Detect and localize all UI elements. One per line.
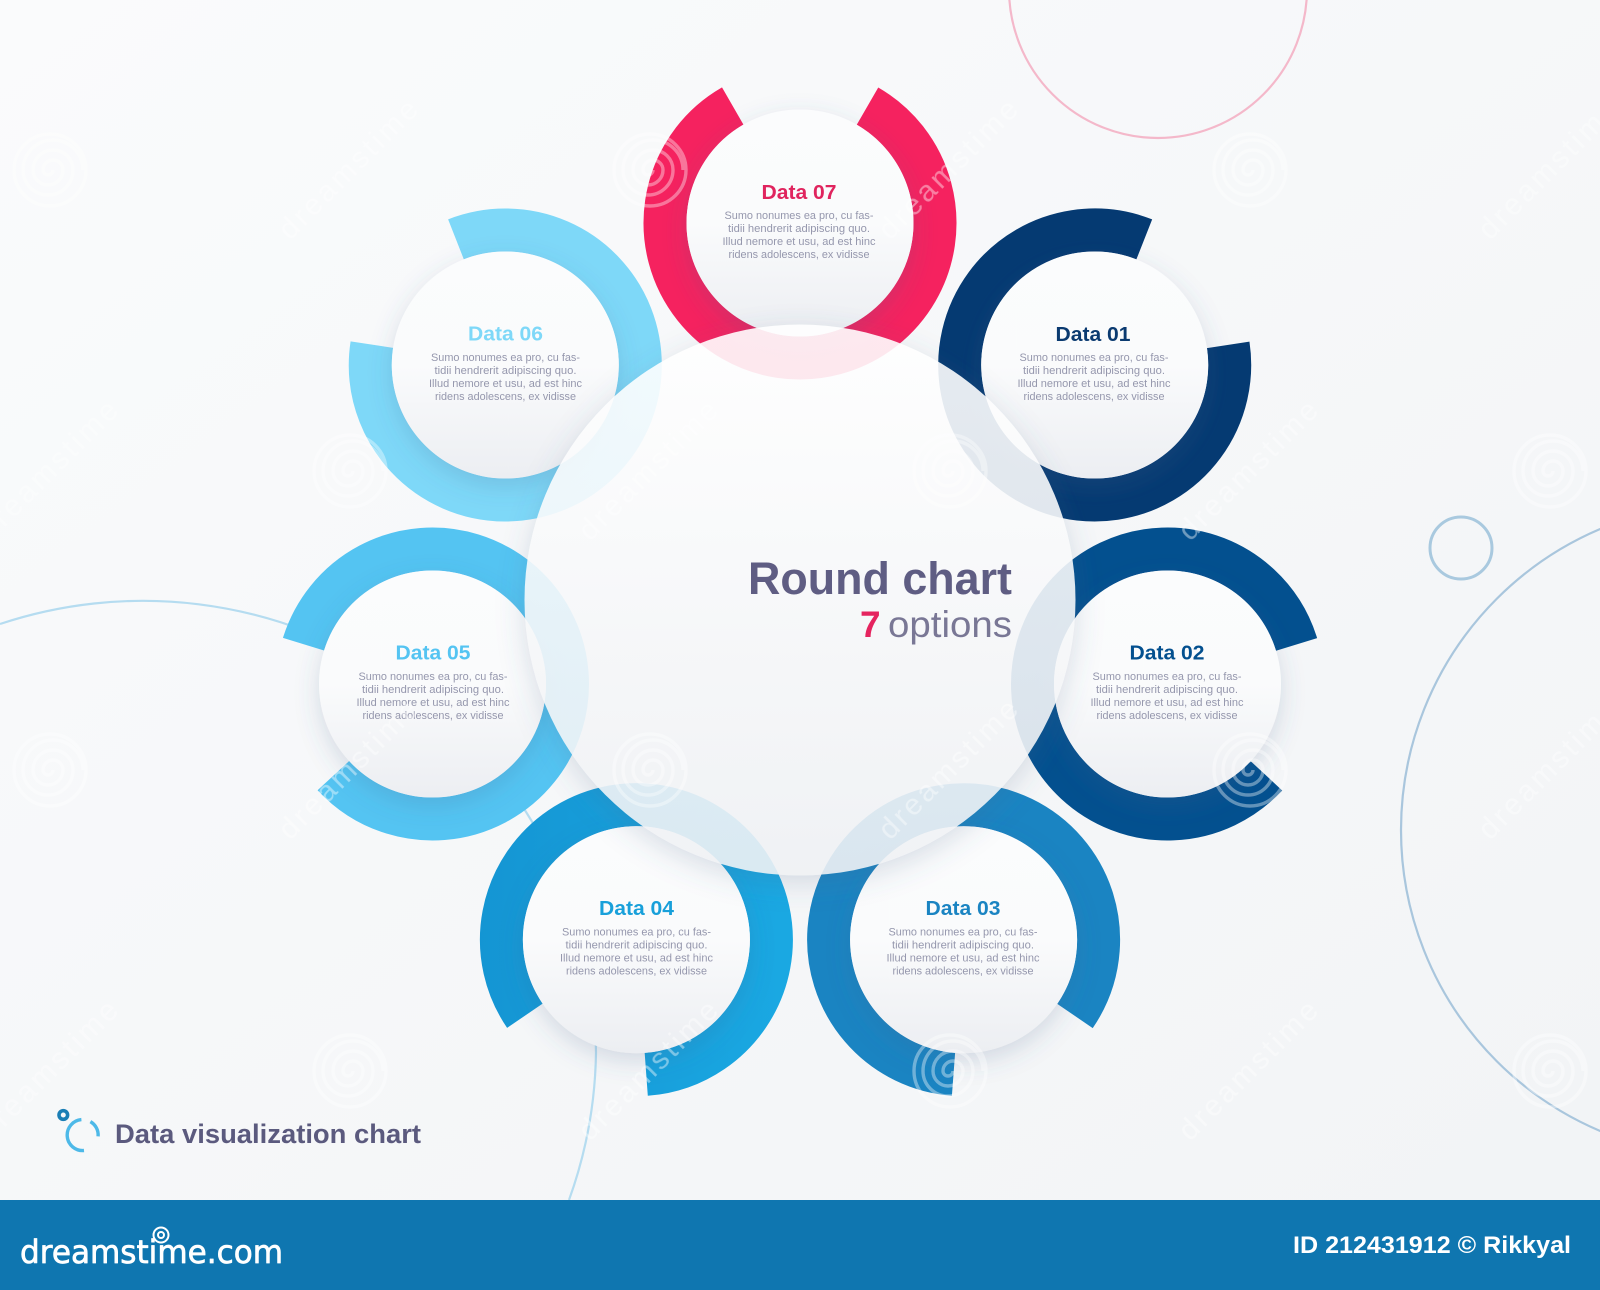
bottom bar	[0, 1200, 1600, 1290]
segment: Data 06: Sumo nonumes ea pro, cu fas-	[431, 352, 580, 364]
image id and credit: ID 212431912 © Rikkyal	[1293, 1232, 1571, 1259]
brand logo text: dreamstime.com	[20, 1233, 283, 1271]
segment: Data 06: tidii hendrerit adipiscing quo.	[434, 365, 576, 377]
decorative circle: large left	[0, 601, 596, 1200]
segment: Data 05: ridens adolescens, ex vidisse	[362, 710, 504, 722]
segment: Data 05: Illud nemore et usu, ad est hinc	[356, 697, 510, 709]
segment: Data 05	[264, 515, 601, 853]
center heading: Round chart	[748, 553, 1012, 604]
segment: Data 01: ridens adolescens, ex vidisse	[1024, 391, 1164, 403]
watermark text: dreamstime	[272, 691, 427, 846]
segment: Data 05: Data 05	[396, 642, 470, 664]
segment: Data 04: Sumo nonumes ea pro, cu fas-	[562, 926, 711, 938]
segment: Data 01: Sumo nonumes ea pro, cu fas-	[1020, 352, 1169, 364]
segment: Data 07	[616, 39, 984, 407]
decorative circle: small right	[1430, 517, 1492, 579]
segment: Data 07: Sumo nonumes ea pro, cu fas-	[724, 210, 874, 222]
watermark text: dreamstime	[1172, 392, 1327, 547]
segment: Data 06: ridens adolescens, ex vidisse	[435, 391, 576, 403]
segment: Data 04: ridens adolescens, ex vidisse	[566, 966, 707, 978]
segment: Data 03: Sumo nonumes ea pro, cu fas-	[888, 926, 1038, 938]
watermark spirals	[14, 134, 1586, 1107]
decorative circle: pink top	[1009, 0, 1307, 138]
segment: Data 03: ridens adolescens, ex vidisse	[892, 966, 1034, 978]
segment: Data 07: Illud nemore et usu, ad est hinc	[722, 236, 876, 248]
segment: Data 03: Illud nemore et usu, ad est hinc	[886, 952, 1040, 964]
segment: Data 02: ridens adolescens, ex vidisse	[1096, 710, 1238, 722]
segment: Data 02: Sumo nonumes ea pro, cu fas-	[1092, 671, 1242, 683]
icon: brand spiral	[154, 1228, 168, 1242]
segment: Data 06: Data 06	[468, 322, 543, 346]
segment: Data 04	[449, 752, 824, 1127]
segment: Data 05: Sumo nonumes ea pro, cu fas-	[358, 671, 508, 683]
segment: Data 02: tidii hendrerit adipiscing quo.	[1096, 684, 1238, 696]
segment: Data 05: tidii hendrerit adipiscing quo.	[362, 684, 504, 696]
watermark text: dreamstime	[872, 91, 1027, 246]
segment: Data 07: tidii hendrerit adipiscing quo.	[728, 223, 870, 235]
center heading: options	[888, 604, 1012, 645]
icon: data ring	[59, 1111, 98, 1151]
segment: Data 07: Data 07	[762, 181, 836, 204]
footer label with icon: Data visualization chart	[115, 1119, 421, 1149]
watermark text: dreamstime	[572, 992, 727, 1147]
segment: Data 03: tidii hendrerit adipiscing quo.	[892, 940, 1034, 952]
segment: Data 02: Data 02	[1130, 642, 1204, 664]
segment: Data 03: Data 03	[926, 897, 1000, 920]
center heading	[748, 553, 1012, 645]
segment: Data 01: Illud nemore et usu, ad est hinc	[1018, 378, 1171, 390]
segment: Data 06: Illud nemore et usu, ad est hinc	[429, 378, 582, 390]
segment: Data 01: Data 01	[1056, 323, 1130, 346]
footer label with icon	[59, 1111, 421, 1151]
segment: Data 04: Illud nemore et usu, ad est hinc	[560, 952, 713, 964]
watermark text: dreamstime	[1172, 992, 1327, 1147]
decorative circle: large right	[1401, 503, 1600, 1157]
segment: Data 02	[977, 493, 1358, 875]
watermark text: dreamstime	[572, 392, 727, 547]
segment: Data 01: tidii hendrerit adipiscing quo.	[1023, 365, 1165, 377]
center heading: 7	[860, 604, 881, 645]
segment: Data 03	[819, 795, 1108, 1084]
central glass circle	[524, 324, 1076, 876]
segment: Data 01	[941, 211, 1248, 519]
segment: Data 07: ridens adolescens, ex vidisse	[728, 249, 870, 261]
segment: Data 06	[330, 190, 680, 540]
segment: Data 04: tidii hendrerit adipiscing quo.	[566, 940, 708, 952]
watermark text: dreamstime	[872, 691, 1027, 846]
segment: Data 02: Illud nemore et usu, ad est hinc	[1090, 697, 1244, 709]
watermark text: dreamstime	[272, 91, 427, 246]
segment: Data 04: Data 04	[599, 897, 675, 920]
